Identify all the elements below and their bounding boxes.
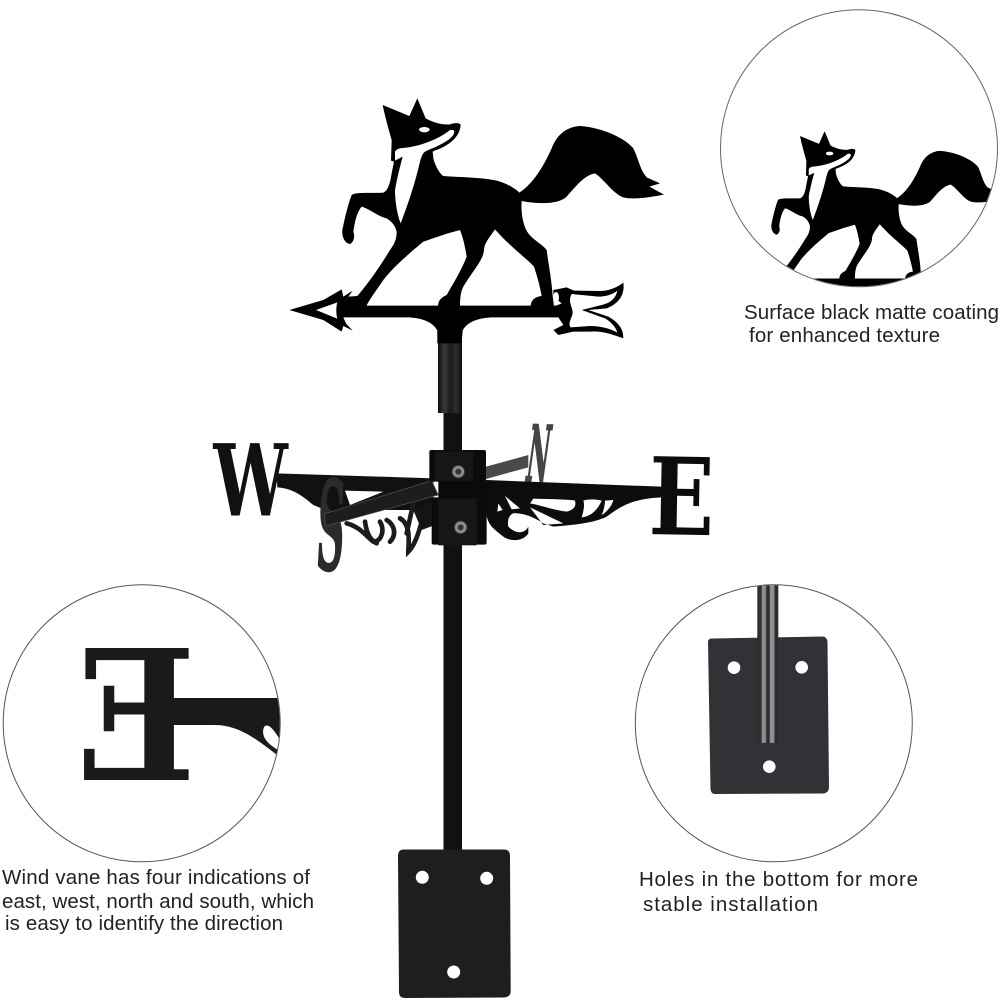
rod (174, 698, 280, 754)
caption: four indications: is easy to identify the direction (5, 912, 283, 935)
weather vane product (213, 98, 715, 998)
compass arms (213, 409, 715, 599)
letter N: N (521, 409, 556, 501)
lower screw (454, 521, 467, 534)
letter W: W (213, 423, 289, 539)
mast pole (438, 340, 462, 852)
plate (708, 636, 829, 794)
letter E: E (648, 434, 715, 561)
lower bracket (432, 497, 487, 545)
arrow head (289, 289, 353, 332)
fox silhouette on arrow (289, 98, 664, 343)
arrow tail fletching (553, 283, 624, 338)
caption: matte coating: for enhanced texture (749, 324, 940, 347)
caption: four indications (2, 866, 314, 935)
south arm (324, 481, 438, 526)
upper screw (452, 465, 465, 478)
letter S: S (313, 453, 349, 599)
caption: bottom holes (639, 868, 918, 916)
inset: letter E detail (3, 585, 282, 862)
west arm with scrollwork (277, 473, 433, 513)
inset: mounting plate detail (635, 580, 912, 862)
north arm (486, 455, 528, 479)
caption: bottom holes: stable installation (643, 893, 818, 916)
caption: four indications: east, west, north and south, which (2, 890, 314, 913)
pole (757, 580, 778, 743)
upper bracket (429, 450, 486, 482)
east arm with scrollwork (486, 480, 662, 540)
inset: fox detail (720, 10, 1000, 305)
caption: bottom holes: Holes in the bottom for more (639, 868, 918, 891)
mirrored letter E: E (76, 611, 196, 824)
mounting plate (398, 850, 511, 998)
south scrollwork (347, 503, 423, 552)
caption: four indications: Wind vane has four indications of (2, 866, 310, 889)
caption: matte coating: Surface black matte coating (744, 301, 999, 324)
caption: matte coating (744, 301, 999, 347)
